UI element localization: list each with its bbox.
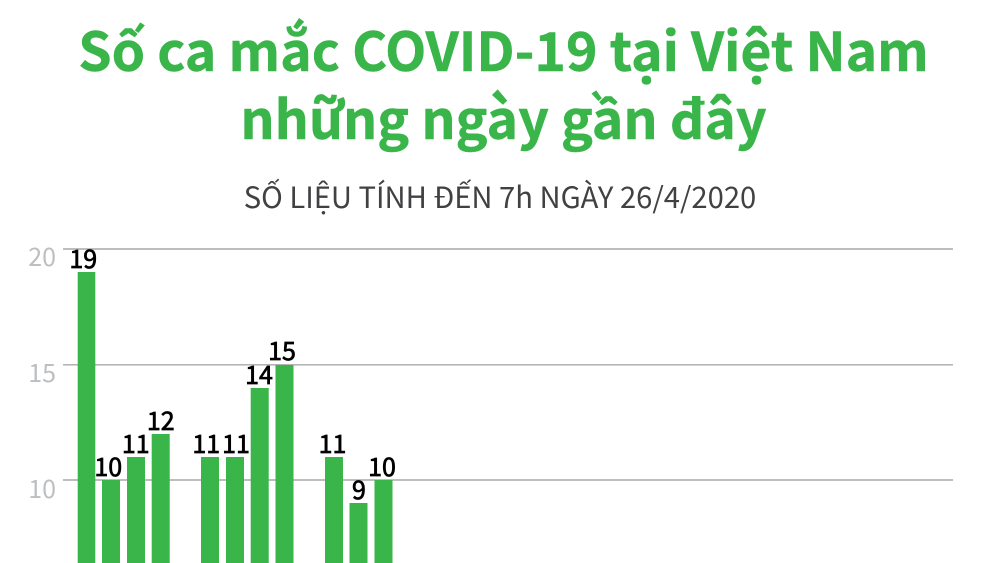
bar value labels: 14	[245, 356, 273, 392]
title: Số ca mắc COVID-19 tại Việt Nam	[78, 10, 929, 87]
y axis labels: 15	[28, 354, 56, 390]
bar value labels: 11	[122, 425, 150, 461]
bar value labels: 10	[368, 448, 396, 484]
bar value labels: 15	[268, 332, 296, 368]
y axis labels	[28, 238, 56, 506]
subtitle: SỐ LIỆU TÍNH ĐẾN 7h NGÀY 26/4/2020	[244, 175, 756, 217]
bar value labels: 19	[69, 240, 97, 276]
bar value labels: 11	[222, 425, 250, 461]
bar value labels: 10	[94, 448, 122, 484]
bar value labels: 11	[319, 425, 346, 461]
bar value labels: 11	[192, 425, 220, 461]
bar value labels: 9	[352, 471, 366, 507]
title: những ngày gần đây	[240, 78, 767, 155]
bar value labels: 12	[147, 402, 175, 438]
bar value labels	[69, 240, 396, 507]
y axis labels: 10	[28, 470, 56, 506]
title	[78, 10, 929, 155]
bars	[78, 272, 392, 563]
y axis labels: 20	[28, 238, 56, 274]
